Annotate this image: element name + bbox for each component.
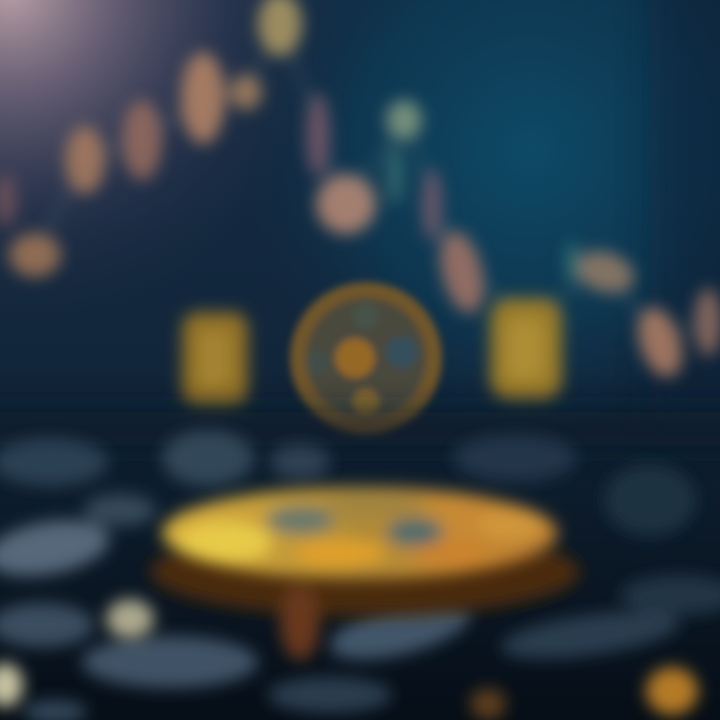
amber coin bottom right: [646, 667, 698, 715]
large golden coin: [150, 487, 580, 660]
dark ground shadow: [0, 412, 720, 446]
icon: centre ornate coin: [290, 282, 442, 434]
pale coin bottom left: [0, 663, 23, 707]
coin shadow and rim: [150, 528, 580, 660]
chart line: [35, 25, 705, 340]
chart: candlestick trend: [0, 0, 720, 382]
icon: right gold coin: [490, 298, 562, 400]
pale coin left: [106, 599, 154, 639]
small glowing coins: [0, 599, 698, 720]
amber glow bottom centre: [470, 688, 506, 720]
candles: [0, 0, 720, 382]
icon: left gold coin: [182, 312, 248, 406]
coin top face: [162, 487, 558, 579]
scattered slate coins: [0, 430, 720, 720]
